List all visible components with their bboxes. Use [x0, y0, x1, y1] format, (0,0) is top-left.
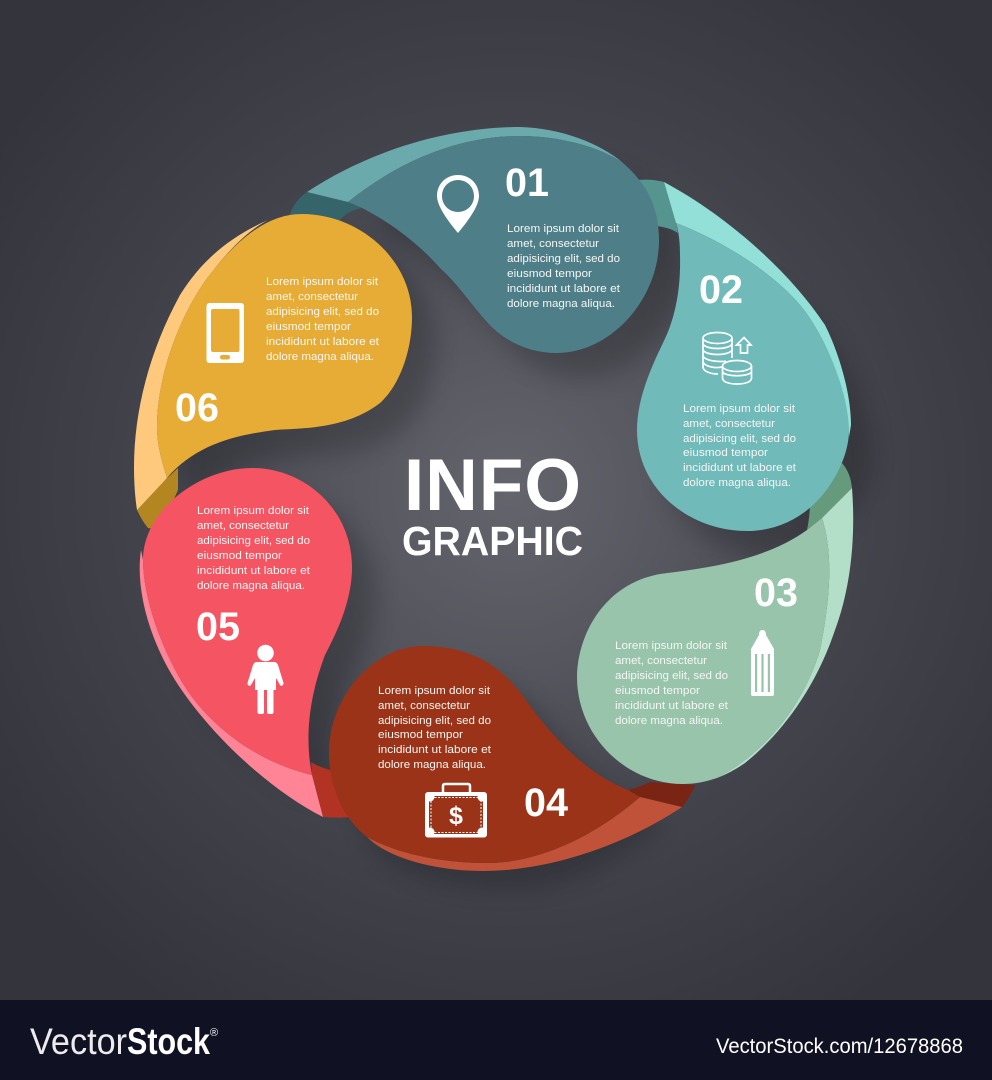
text block 02 — [683, 403, 797, 489]
footer logo: Vector — [30, 1021, 127, 1062]
outer band 05 — [140, 550, 323, 817]
text block 05: eiusmod tempor — [197, 550, 282, 562]
text block 02: eiusmod tempor — [683, 447, 768, 459]
text block 01: Lorem ipsum dolor sit — [507, 223, 620, 235]
text block 04: adipisicing elit, sed do — [378, 715, 491, 727]
text block 02: incididunt ut labore et — [683, 462, 797, 474]
text block 05: incididunt ut labore et — [197, 565, 311, 577]
fold: segment 04 — [628, 782, 695, 807]
teardrop 03 — [577, 518, 829, 784]
text block 03: amet, consectetur — [615, 655, 707, 667]
text block 06: incididunt ut labore et — [266, 336, 380, 348]
text block 03: eiusmod tempor — [615, 685, 700, 697]
text block 06: adipisicing elit, sed do — [266, 306, 379, 318]
teardrop 06 — [157, 214, 412, 478]
icon: briefcase with dollar: $ — [449, 802, 463, 830]
text block 03 — [615, 640, 729, 727]
text block 02: dolore magna aliqua. — [683, 477, 791, 489]
text block 04: Lorem ipsum dolor sit — [378, 685, 491, 697]
icon: briefcase with dollar — [425, 784, 487, 838]
number 02: 02 — [699, 268, 743, 312]
text block 05: Lorem ipsum dolor sit — [197, 505, 310, 517]
fold: segment 03 — [807, 463, 852, 530]
outer band 02 — [664, 182, 851, 437]
number 01: 01 — [505, 161, 549, 205]
panel: segment 01 — [307, 127, 659, 353]
panel: segment 05 — [140, 468, 352, 817]
text block 03: Lorem ipsum dolor sit — [615, 640, 728, 652]
panel: segment 04 — [329, 646, 682, 871]
text block 02: adipisicing elit, sed do — [683, 433, 796, 445]
footer logo — [30, 1021, 218, 1062]
text block 04 — [378, 685, 492, 771]
text block 06: amet, consectetur — [266, 291, 358, 303]
text block 05 — [197, 505, 311, 592]
number 04: 04 — [524, 781, 568, 825]
icon: coins with arrow — [703, 332, 752, 384]
text block 01: eiusmod tempor — [507, 268, 592, 280]
number 05: 05 — [196, 605, 240, 649]
fold: segment 06 — [137, 468, 178, 530]
text block 02: Lorem ipsum dolor sit — [683, 403, 796, 415]
icon: smartphone — [206, 303, 244, 363]
teardrop 05 — [143, 468, 352, 775]
text block 04: incididunt ut labore et — [378, 744, 492, 756]
fold: segment 05 — [311, 762, 360, 818]
icon: pencil — [751, 630, 774, 696]
text block 06: Lorem ipsum dolor sit — [266, 276, 379, 288]
panel: segment 02 — [637, 182, 851, 531]
teardrop 04 — [329, 646, 640, 863]
text block 03: incididunt ut labore et — [615, 700, 729, 712]
title: GRAPHIC — [402, 518, 583, 564]
text block 01: dolore magna aliqua. — [507, 298, 615, 310]
fold: segment 02 — [630, 180, 678, 233]
teardrop 02 — [637, 223, 849, 531]
title — [402, 445, 583, 564]
panel: segment 06 — [134, 214, 412, 510]
footer image id: VectorStock.com/12678868 — [716, 1035, 963, 1058]
outer band 01 — [307, 127, 623, 202]
text block 06: eiusmod tempor — [266, 321, 351, 333]
text block 06: dolore magna aliqua. — [266, 351, 374, 363]
number 03: 03 — [754, 571, 798, 615]
text block 04: eiusmod tempor — [378, 729, 463, 741]
icon: map pin — [437, 175, 479, 233]
text block 02: amet, consectetur — [683, 418, 775, 430]
text block 03: adipisicing elit, sed do — [615, 670, 728, 682]
number 06: 06 — [175, 386, 219, 430]
text block 03: dolore magna aliqua. — [615, 715, 723, 727]
text block 04: dolore magna aliqua. — [378, 759, 486, 771]
text block 05: adipisicing elit, sed do — [197, 535, 310, 547]
text block 06 — [266, 276, 380, 363]
text block 05: dolore magna aliqua. — [197, 580, 305, 592]
teardrop 01 — [348, 136, 659, 353]
outer band 06 — [134, 220, 268, 510]
fold: segment 01 — [288, 192, 362, 220]
text block 01: adipisicing elit, sed do — [507, 253, 620, 265]
text block 05: amet, consectetur — [197, 520, 289, 532]
text block 01: incididunt ut labore et — [507, 283, 621, 295]
panel: segment 03 — [577, 488, 853, 784]
text block 04: amet, consectetur — [378, 700, 470, 712]
outer band 04 — [367, 797, 682, 871]
text block 01 — [507, 223, 621, 310]
icon: person — [247, 645, 284, 714]
title: INFO — [404, 445, 581, 526]
text block 01: amet, consectetur — [507, 238, 599, 250]
footer bar — [0, 1000, 992, 1080]
footer logo: ® — [210, 1027, 218, 1039]
outer band 03 — [717, 488, 853, 778]
footer logo: Stock — [127, 1021, 210, 1062]
